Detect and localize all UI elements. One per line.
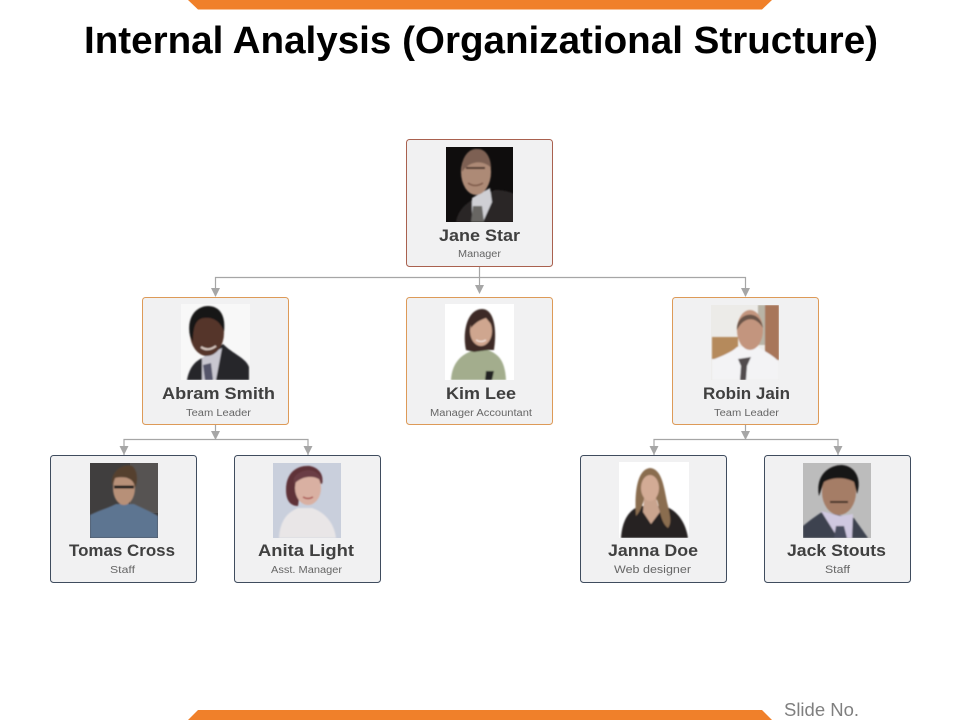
bottom orange banner <box>188 710 772 720</box>
role: Asst. Manager: Asst. Manager <box>271 565 343 576</box>
panel: Anita Light <box>234 456 380 582</box>
photo: Jack Stouts <box>803 463 871 538</box>
role: Manager Accountant: Manager Accountant <box>430 408 532 419</box>
role: Team Leader: Team Leader <box>186 408 252 419</box>
connector: manager to team row <box>211 267 750 297</box>
name: Jane Star: Jane Star <box>439 226 520 245</box>
name: Abram Smith: Abram Smith <box>162 384 275 403</box>
name: Robin Jain: Robin Jain <box>703 384 790 403</box>
panel: Abram Smith <box>142 298 288 424</box>
role: Team Leader: Team Leader <box>714 408 780 419</box>
role: Manager: Manager <box>458 249 502 260</box>
photo: Jane Star <box>446 147 514 222</box>
top orange banner <box>188 0 772 10</box>
title: Internal Analysis (Organizational Structure) <box>84 20 878 62</box>
panel: Jane Star <box>406 140 552 266</box>
role: Staff: Staff <box>110 565 135 576</box>
panel: Janna Doe <box>580 456 726 582</box>
name: Jack Stouts: Jack Stouts <box>787 541 886 560</box>
role: Web designer: Web designer <box>614 564 691 576</box>
role: Staff: Staff <box>825 564 851 576</box>
photo: Janna Doe <box>619 462 689 538</box>
panel: Kim Lee <box>406 298 552 424</box>
panel: Robin Jain <box>672 298 818 424</box>
panel: Jack Stouts <box>764 456 910 582</box>
connector: Robin Jain to staff <box>650 425 842 455</box>
slide number label: Slide No. <box>784 700 859 720</box>
photo: Robin Jain <box>711 305 779 380</box>
name: Janna Doe: Janna Doe <box>608 541 698 560</box>
connector: Abram Smith to staff <box>120 425 312 455</box>
photo: Anita Light <box>273 463 341 538</box>
panel: Tomas Cross <box>50 456 196 582</box>
name: Tomas Cross: Tomas Cross <box>69 541 175 560</box>
photo: Tomas Cross <box>90 463 158 538</box>
photo: Abram Smith <box>181 304 250 380</box>
name: Anita Light: Anita Light <box>258 541 354 560</box>
name: Kim Lee: Kim Lee <box>446 384 516 403</box>
photo: Kim Lee <box>445 304 514 380</box>
